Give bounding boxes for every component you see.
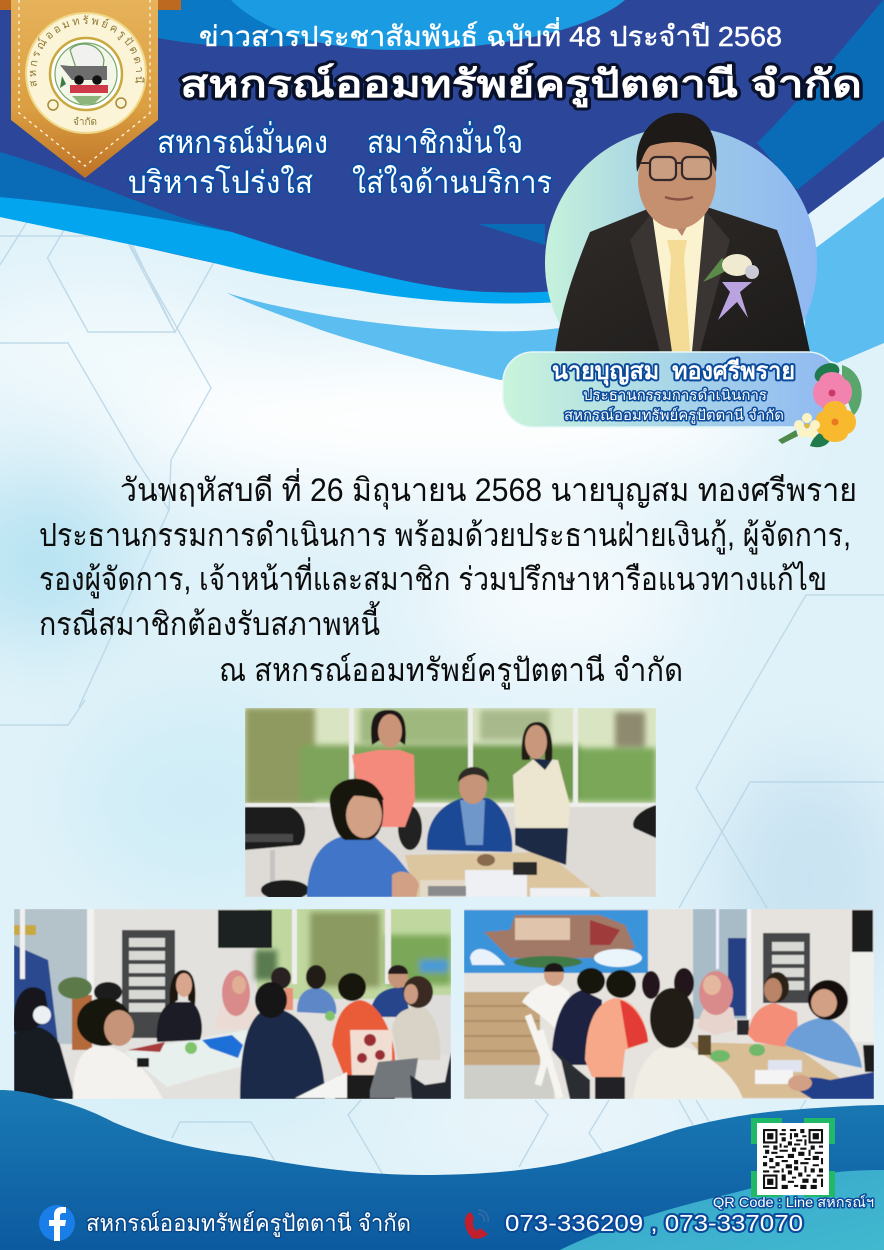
background: hexagon line pattern	[0, 222, 884, 1175]
icon: facebook	[39, 1205, 75, 1241]
body text: meeting announcement: กรณีสมาชิกต้องรับสภาพหนี้	[39, 601, 381, 642]
photo: meeting under mural	[464, 909, 874, 1099]
name plate	[503, 352, 838, 427]
title: cooperative name: สหกรณ์ออมทรัพย์ครูปัตตานี จำกัด	[180, 63, 862, 108]
body text: meeting announcement: วันพฤหัสบดี ที่ 26 มิถุนายน 2568 นายบุญสม ทองศรีพราย	[120, 468, 857, 510]
header line: newsletter issue: ข่าวสารประชาสัมพันธ์ ฉบับที่ 48 ประจำปี 2568	[199, 17, 782, 52]
header: navy banner with swooshes	[0, 0, 884, 380]
portrait: chairman in circle	[545, 113, 817, 399]
footer: wave band	[0, 1090, 884, 1250]
QR code with green frame	[751, 1118, 835, 1197]
slogan block: ใส่ใจด้านบริการ	[352, 165, 552, 200]
logo: cooperative seal: สหกรณ์ออมทรัพย์ครูปัตตานี	[30, 15, 145, 87]
slogan block: สหกรณ์มั่นคง	[157, 121, 328, 160]
QR label: QR Code : Line สหกรณ์ฯ	[713, 1194, 874, 1210]
chairman role: ประธานกรรมการดำเนินการ	[583, 388, 767, 404]
gold ribbon with logo badge	[0, 0, 181, 178]
photo: four people at cafe table	[245, 708, 656, 900]
chairman role: สหกรณ์ออมทรัพย์ครูปัตตานี จำกัด	[564, 407, 784, 424]
photo: meeting at table, window side	[13, 909, 451, 1099]
icon: tropical flowers	[778, 359, 862, 447]
footer: facebook page name: สหกรณ์ออมทรัพย์ครูปัตตานี จำกัด	[86, 1210, 411, 1237]
icon: phone	[465, 1210, 488, 1239]
footer: phone numbers: 073-336209 , 073-337070	[505, 1210, 803, 1236]
boutonniere flower	[703, 254, 759, 320]
body text: meeting announcement	[39, 468, 857, 690]
body text: meeting announcement: ณ สหกรณ์ออมทรัพย์ครูปัตตานี จำกัด	[219, 652, 683, 690]
logo: cooperative seal: จำกัด	[73, 117, 97, 128]
slogan block: บริหารโปร่งใส	[128, 165, 313, 200]
chairman name: นายบุญสม ทองศรีพราย	[552, 358, 795, 387]
logo: cooperative seal	[25, 12, 147, 134]
slogan block: สมาชิกมั่นใจ	[367, 121, 523, 160]
chairman role	[564, 388, 784, 424]
slogan block	[128, 121, 552, 200]
